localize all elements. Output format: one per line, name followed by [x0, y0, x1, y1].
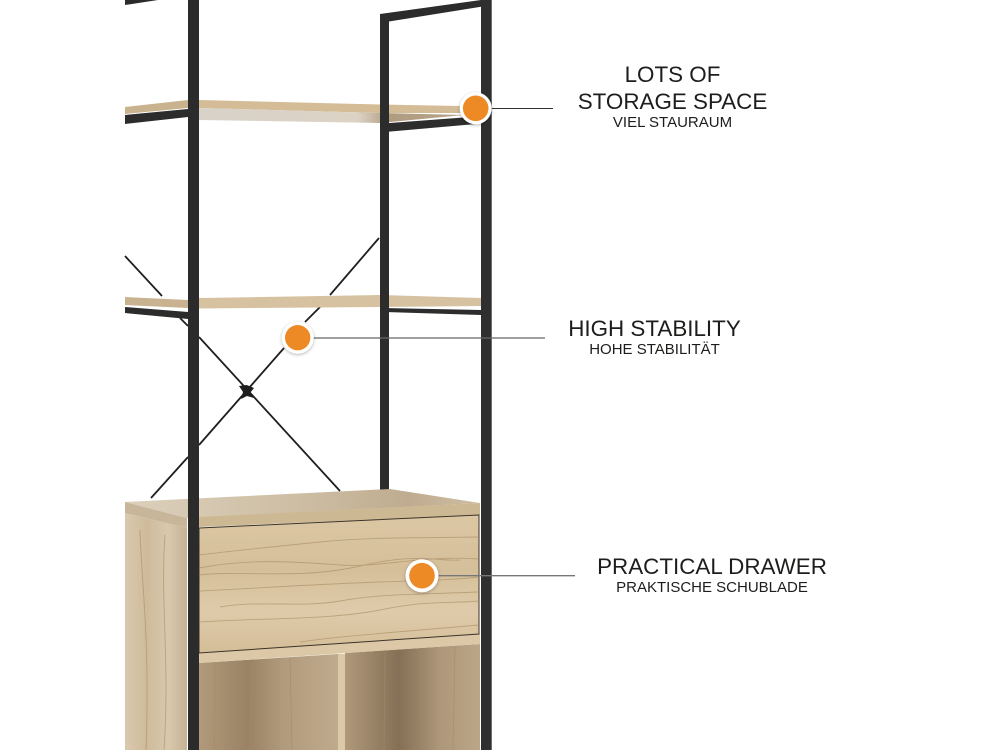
- cabinet top surface: [125, 489, 480, 518]
- label: lots of storage space: [578, 62, 767, 131]
- label: practical drawer: PRAKTISCHE SCHUBLADE: [616, 579, 808, 596]
- label: practical drawer: [597, 554, 827, 596]
- shelf frame and boards: [125, 0, 492, 750]
- label: high stability: HIGH STABILITY: [568, 316, 741, 341]
- label: lots of storage space: STORAGE SPACE: [578, 89, 767, 114]
- left post: [188, 0, 199, 750]
- label: high stability: HOHE STABILITÄT: [589, 341, 720, 358]
- label: lots of storage space: VIEL STAURAUM: [613, 114, 732, 131]
- brace crossing joint: [239, 385, 254, 399]
- middle shelf: [125, 295, 481, 319]
- marker: storage space: [460, 92, 492, 124]
- compartment divider: [338, 654, 345, 750]
- drawer front: [199, 515, 479, 653]
- label: practical drawer: PRACTICAL DRAWER: [597, 554, 827, 579]
- lower rail: [199, 634, 480, 663]
- label: high stability: [568, 316, 741, 358]
- upper shelf: [125, 100, 476, 132]
- marker: drawer: [406, 559, 438, 592]
- wood grain: [140, 530, 479, 750]
- back right post: [380, 0, 481, 490]
- label: lots of storage space: LOTS OF: [625, 62, 720, 87]
- front right post: [481, 0, 492, 750]
- cabinet: [125, 489, 480, 750]
- top left bar fragment: [125, 0, 158, 5]
- open compartments: [199, 654, 338, 750]
- callout lines: [312, 108, 575, 576]
- cabinet side panel: [125, 513, 187, 750]
- diagonal cross braces: [125, 238, 379, 498]
- marker: stability: [282, 322, 314, 354]
